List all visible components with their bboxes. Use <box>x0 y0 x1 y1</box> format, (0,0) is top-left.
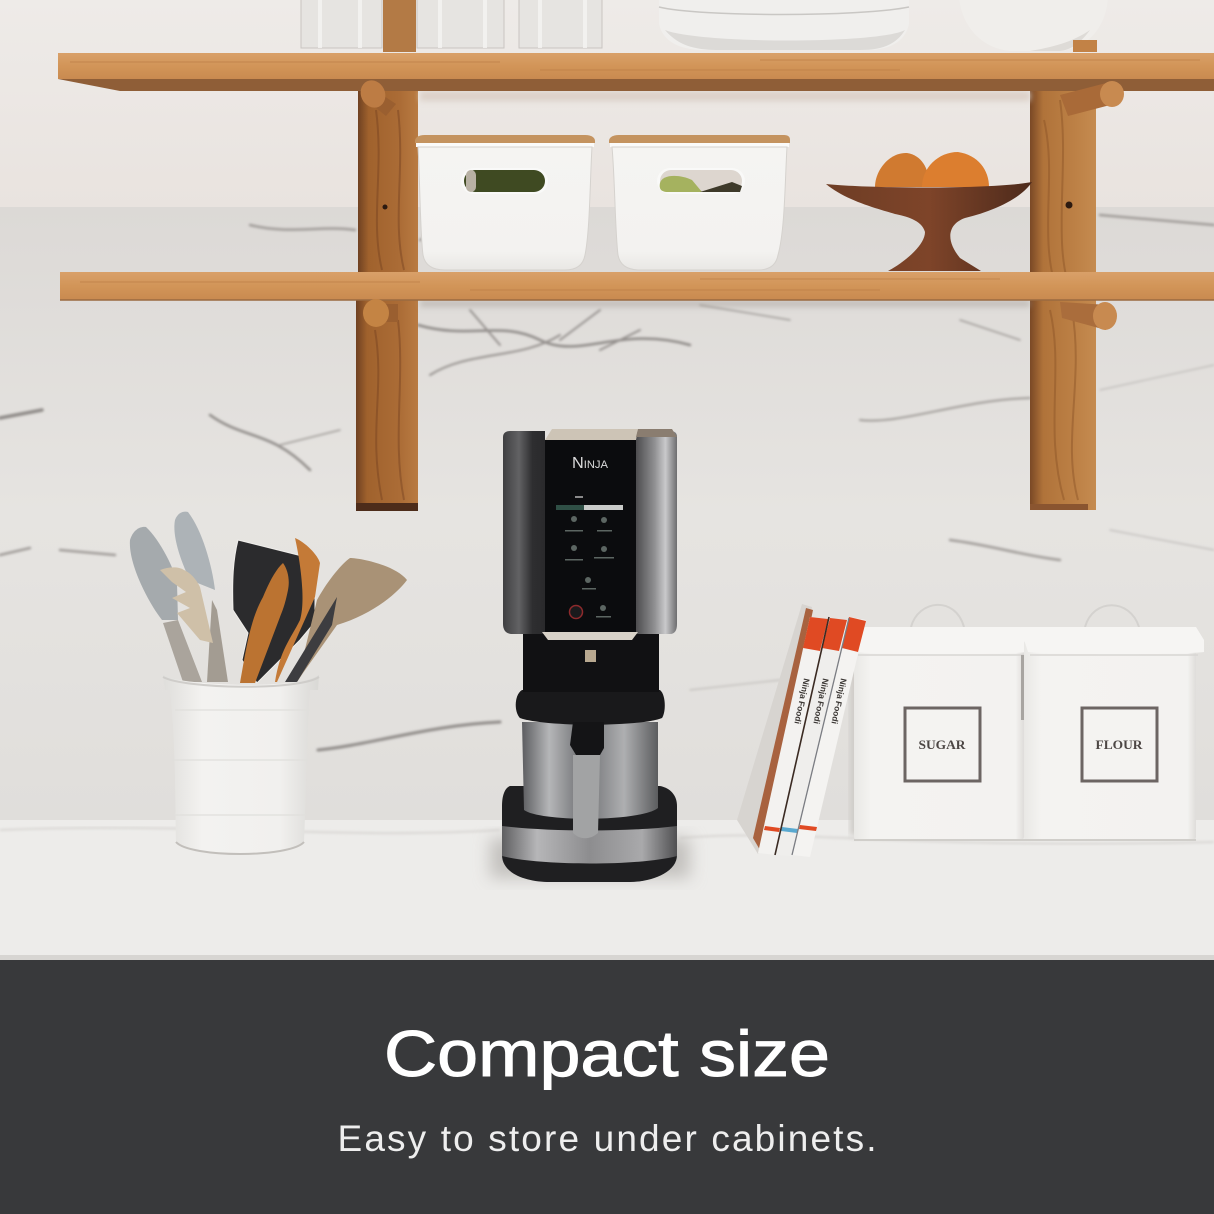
utensils in crock <box>130 512 407 683</box>
glasses <box>301 0 602 48</box>
black spatula <box>233 540 315 683</box>
book 2 <box>758 617 828 855</box>
background: marble splashback <box>0 207 1214 822</box>
sugar canister: SUGAR <box>918 738 967 752</box>
collar <box>516 690 665 725</box>
white ceramic crock <box>163 675 319 854</box>
soft shadow <box>490 838 690 878</box>
fruit bowl with oranges <box>826 152 1032 271</box>
caption band <box>0 960 1214 1214</box>
counter top <box>0 820 1214 960</box>
wall shadow behind books and canisters <box>850 670 860 835</box>
book 4 <box>792 617 866 857</box>
control panel <box>545 440 636 632</box>
flour canister <box>1020 605 1204 840</box>
book 3 <box>775 618 848 856</box>
upper housing left <box>503 431 545 634</box>
cookbooks: Ninja Foodi <box>811 678 831 725</box>
label <box>1082 708 1157 781</box>
lower cap <box>542 632 638 640</box>
Ninja appliance <box>490 429 690 882</box>
top shelf items <box>301 0 1108 51</box>
sugar canister <box>854 605 1028 840</box>
neck <box>523 634 659 692</box>
cookbooks: Ninja Foodi <box>792 678 812 725</box>
upper housing right <box>636 431 677 634</box>
storage tub left <box>415 135 595 270</box>
shadows under shelves <box>420 91 1030 307</box>
top cap <box>545 429 638 440</box>
left upright post <box>356 0 418 511</box>
wooden pegs <box>356 76 1124 330</box>
silver tongs <box>130 527 178 620</box>
badge <box>585 650 596 662</box>
label <box>905 708 980 781</box>
handle <box>911 605 964 627</box>
handle spout <box>570 722 604 838</box>
book 1 <box>737 604 812 854</box>
tan spatula <box>297 558 407 682</box>
orange wooden spoon back <box>275 538 320 682</box>
handle <box>1085 605 1139 627</box>
brand logo: Ninja <box>572 455 609 472</box>
power button <box>570 606 582 618</box>
large bowl <box>959 0 1108 51</box>
beige pasta server <box>160 567 213 643</box>
cookbooks: Ninja Foodi <box>829 678 849 725</box>
flour canister: FLOUR <box>1096 738 1144 752</box>
base <box>502 786 677 882</box>
dark handle <box>285 597 337 682</box>
wooden spoon <box>240 563 289 683</box>
cookbooks <box>737 604 866 857</box>
background: upper plaster wall <box>0 0 1214 208</box>
container <box>522 722 658 819</box>
storage tub right <box>609 135 790 270</box>
stacked bowls <box>659 0 909 50</box>
bottom shelf <box>60 272 1214 300</box>
heading: Compact size <box>384 1017 830 1090</box>
subheading: Easy to store under cabinets. <box>338 1118 876 1159</box>
right upright post <box>1030 40 1097 510</box>
top shelf <box>58 53 1214 91</box>
